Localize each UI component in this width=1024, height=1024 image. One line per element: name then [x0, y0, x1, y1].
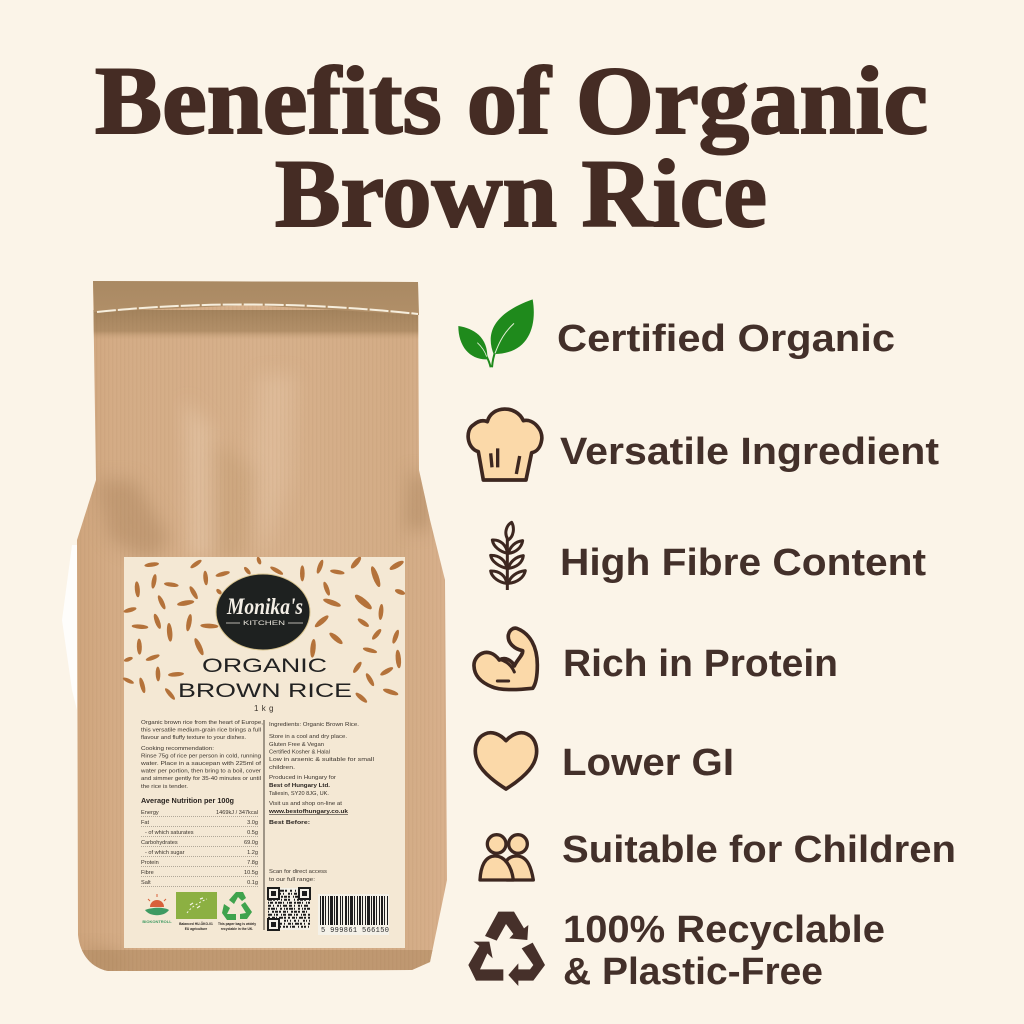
product description text: this versatile medium-grain rice brings a full [141, 728, 261, 734]
logo: Monika's Kitchen: KITCHEN [243, 621, 285, 627]
bag fringe [62, 545, 77, 710]
nutrition table: Salt [141, 880, 151, 886]
product description text: water. Place in a saucepan with 225ml of [140, 761, 262, 767]
bag top flap [93, 281, 419, 315]
ingredients and producer text: Ingredients: Organic Brown Rice. [269, 722, 359, 728]
product description text [140, 720, 263, 790]
nutrition table: 69.0g [244, 840, 258, 846]
nutrition table: 3.0g [247, 820, 258, 826]
logo captions: recyclable in the UK. [221, 927, 253, 931]
product name [178, 656, 352, 713]
nutrition table: Fat [141, 820, 150, 826]
nutrition table: 1469kJ / 347kcal [216, 810, 258, 816]
icon: recycling arrows [468, 912, 545, 986]
ingredients and producer text: Certified Kosher & Halal [269, 750, 330, 756]
benefit: Certified Organic [458, 299, 895, 367]
certification logos [142, 892, 256, 931]
product description text: water per portion, then bring to a boil, cover [140, 768, 261, 774]
ingredients and producer text: Gluten Free & Vegan [269, 742, 324, 748]
logo captions: EU agriculture [185, 927, 207, 931]
nutrition table: Energy [141, 810, 159, 816]
product description text: Rinse 75g of rice per person in cold, running [141, 754, 261, 760]
logo: recyclable [222, 892, 252, 920]
benefit text [563, 909, 885, 993]
benefit text: & Plastic-Free [563, 951, 823, 993]
benefit: Versatile Ingredient [468, 409, 939, 480]
benefit: Suitable for Children: Suitable for Children [562, 829, 956, 871]
nutrition table: 7.8g [247, 860, 258, 866]
ingredients and producer text: Low in arsenic & suitable for small [269, 757, 374, 763]
nutrition table: Carbohydrates [141, 840, 178, 846]
ingredients and producer text: Store in a cool and dry place. [269, 734, 347, 740]
product description text: Organic brown rice from the heart of Europe, [141, 720, 263, 726]
logo captions: Balanced HU-ÖKO-01 [179, 922, 213, 926]
product description text: the rice is tender. [141, 784, 188, 790]
nutrition table: 10.5g [244, 870, 258, 876]
nutrition table: Average Nutrition per 100g [141, 798, 234, 805]
product name: ORGANIC [202, 656, 327, 677]
benefit text: 100% Recyclable [563, 909, 885, 951]
title [95, 47, 928, 247]
ingredients and producer text: Visit us and shop on-line at [269, 801, 342, 807]
benefit: Lower GI [475, 733, 734, 789]
nutrition table [141, 798, 258, 886]
bag folds and shading [82, 281, 433, 971]
title: Benefits of Organic [95, 47, 928, 154]
product name: 1kg [254, 704, 274, 713]
logo: EU organic leaf [176, 892, 217, 919]
product description text: Cooking recommendation: [141, 746, 214, 752]
logo captions: This paper bag is widely [218, 922, 256, 926]
bag body [77, 281, 447, 971]
benefit: Certified Organic: Certified Organic [557, 318, 895, 360]
nutrition table: - of which saturates [145, 830, 194, 836]
logo: Monika's Kitchen [216, 574, 310, 650]
product: paper bag [62, 275, 455, 980]
ingredients and producer text: Taliesin, SY20 8JG, UK. [269, 791, 329, 797]
nutrition table: 0.1g [247, 880, 258, 886]
benefit: Suitable for Children [480, 829, 956, 880]
benefit: High Fibre Content [491, 522, 926, 590]
logo captions [179, 922, 256, 931]
ingredients and producer text: Best Before: [269, 820, 310, 826]
benefit: High Fibre Content: High Fibre Content [560, 542, 926, 584]
icon: two children [480, 835, 533, 880]
nutrition table: 1.2g [247, 850, 258, 856]
logo: Biokontroll: BIOKONTROLL [142, 919, 172, 924]
ingredients and producer text: Scan for direct access [269, 869, 327, 875]
QR code [268, 888, 310, 930]
column divider [264, 720, 265, 930]
benefit: 100% Recyclable & Plastic-Free [468, 909, 885, 993]
icon: heart [475, 733, 537, 789]
product description text: flavour and fluffy texture to your dishes. [141, 735, 246, 741]
nutrition table: Fibre [141, 870, 154, 876]
icon: flexed arm [474, 628, 537, 690]
stitching [97, 304, 418, 314]
icon: green leaves [458, 299, 534, 367]
nutrition table: 0.5g [247, 830, 258, 836]
nutrition table: - of which sugar [145, 850, 185, 856]
icon: wheat [491, 522, 525, 590]
ingredients and producer text: www.bestofhungary.co.uk [268, 809, 349, 815]
title: Brown Rice [275, 140, 767, 247]
label [122, 555, 406, 948]
ingredients and producer text: to our full range: [269, 877, 315, 883]
product description text: and simmer gently for 35-40 minutes or until [141, 776, 261, 782]
benefit: Rich in Protein: Rich in Protein [563, 643, 838, 685]
ingredients and producer text: Best of Hungary Ltd. [269, 783, 330, 789]
ingredients and producer text: children. [269, 765, 296, 771]
benefit: Rich in Protein [474, 628, 838, 690]
barcode [318, 894, 389, 935]
ingredients and producer text [268, 722, 374, 883]
nutrition table: Protein [141, 860, 159, 866]
benefit: Versatile Ingredient: Versatile Ingredient [560, 431, 939, 473]
product name: BROWN RICE [178, 681, 352, 702]
icon: chef hat [468, 409, 542, 480]
barcode: 5 999861 566150 [321, 927, 389, 935]
rice grains pattern [122, 555, 406, 704]
benefit: Lower GI: Lower GI [562, 742, 734, 784]
ingredients and producer text: Produced in Hungary for [269, 775, 336, 781]
logo: Monika's Kitchen: Monika's [226, 594, 303, 619]
